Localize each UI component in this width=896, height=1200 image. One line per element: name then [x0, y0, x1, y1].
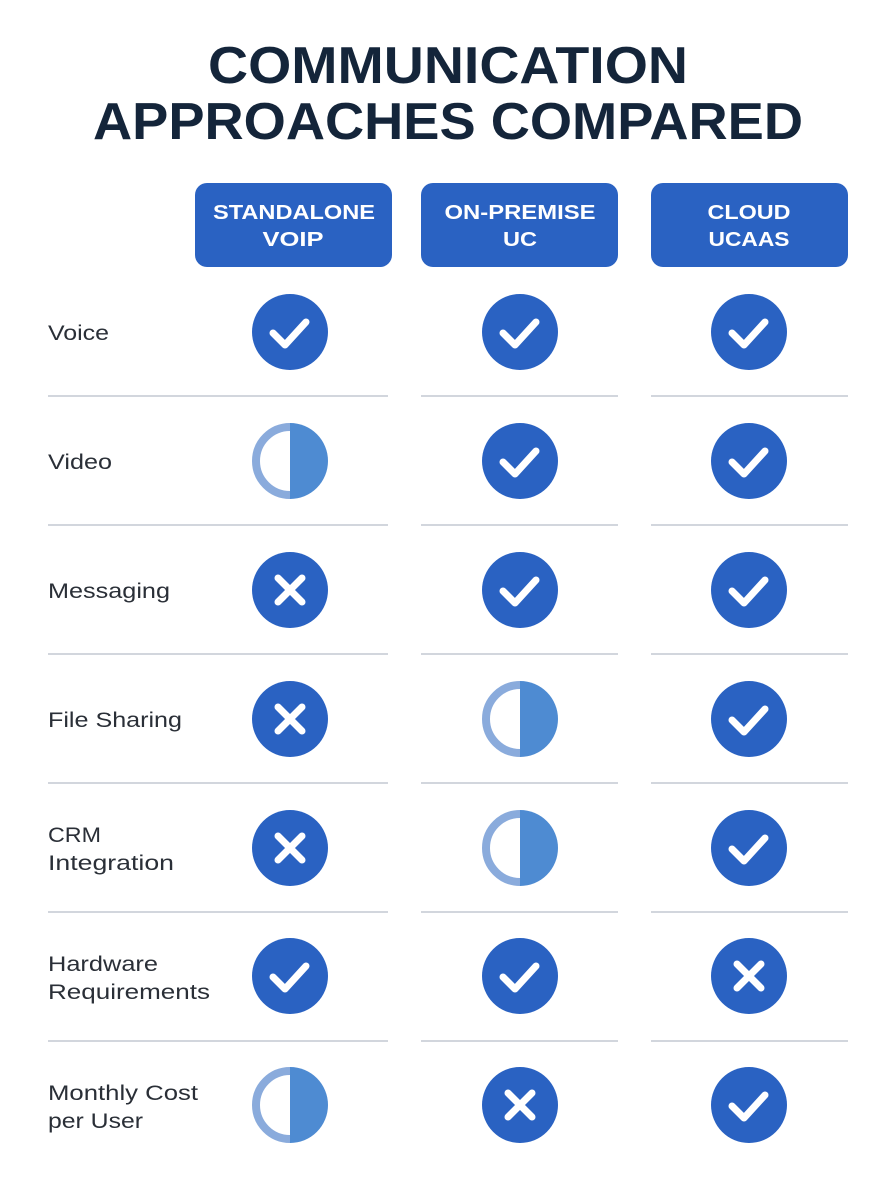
header: standalone voip: VOIP [262, 229, 324, 251]
header: cloud ucaas: CLOUD [708, 202, 790, 224]
header: on-premise uc [421, 183, 618, 267]
title: COMMUNICATION [208, 37, 688, 95]
header: standalone voip [195, 183, 392, 267]
row labels: per User [48, 1110, 143, 1133]
row labels: Hardware [48, 953, 158, 976]
header: on-premise uc: UC [503, 229, 537, 251]
title [93, 37, 803, 151]
rating icons [252, 294, 787, 1143]
row labels: Requirements [48, 981, 210, 1004]
row labels: Monthly Cost [48, 1082, 198, 1105]
header: cloud ucaas [651, 183, 848, 267]
row labels: Video [48, 451, 112, 474]
row labels: CRM [48, 824, 101, 847]
header: standalone voip: STANDALONE [213, 202, 375, 224]
column headers [195, 183, 848, 267]
row labels [48, 322, 210, 1133]
row labels: File Sharing [48, 709, 182, 732]
row labels: Integration [48, 852, 174, 875]
row labels: Voice [48, 322, 109, 345]
header: on-premise uc: ON-PREMISE [444, 202, 596, 224]
row labels: Messaging [48, 580, 170, 603]
title: APPROACHES COMPARED [93, 93, 803, 151]
header: cloud ucaas: UCAAS [708, 229, 790, 251]
